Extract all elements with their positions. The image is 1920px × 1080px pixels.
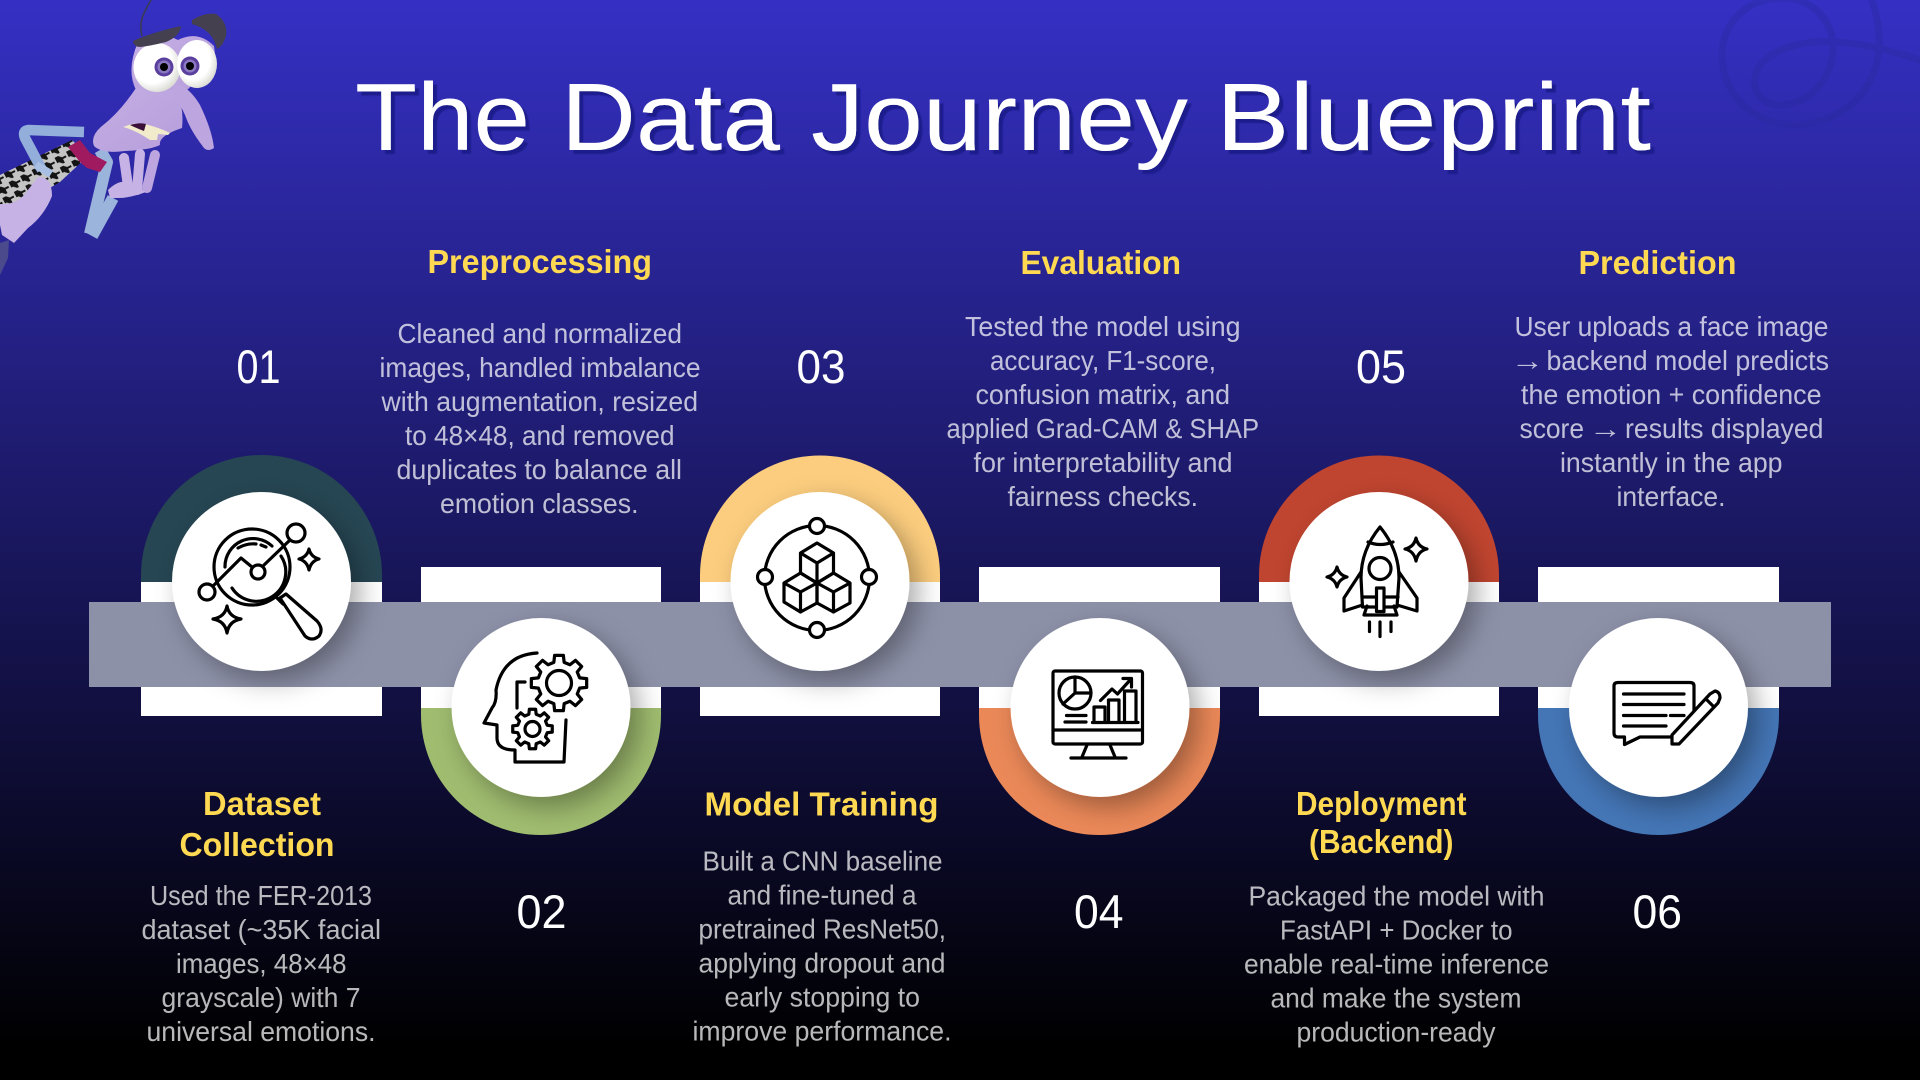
heading: Dataset Collection: Dataset bbox=[203, 785, 321, 822]
text block: Preprocessing: images, handled imbalance bbox=[380, 352, 700, 383]
text block: Preprocessing: Cleaned and normalized bbox=[398, 318, 682, 349]
text block: Prediction: instantly in the app bbox=[1560, 447, 1782, 478]
step 05 number: 05 bbox=[1356, 340, 1406, 393]
text block: Prediction: interface. bbox=[1616, 481, 1726, 512]
step 06 number: 06 bbox=[1632, 885, 1682, 938]
text block: Prediction: results displayed bbox=[1625, 413, 1824, 444]
timeline strip bbox=[89, 602, 1831, 687]
heading: Dataset Collection bbox=[180, 785, 334, 863]
text block: Preprocessing bbox=[380, 318, 700, 519]
icon: monitor with charts bbox=[1053, 671, 1142, 758]
icon: magnifier over chart bbox=[199, 524, 321, 639]
text block: Model Training: early stopping to bbox=[724, 982, 920, 1012]
text block: Model Training: and fine-tuned a bbox=[728, 880, 917, 910]
text block: Dataset Collection: universal emotions. bbox=[146, 1016, 376, 1047]
text block: Model Training: improve performance. bbox=[692, 1016, 952, 1046]
step 3 circle bbox=[730, 492, 910, 671]
text block: Model Training: Built a CNN baseline bbox=[702, 846, 942, 876]
text block: Preprocessing: duplicates to balance all bbox=[396, 454, 682, 485]
text block: Evaluation: accuracy, F1-score, bbox=[990, 345, 1216, 376]
text block: Prediction: → bbox=[1589, 413, 1622, 444]
text block: Evaluation: for interpretability and bbox=[974, 447, 1232, 478]
decorative swirl bbox=[1722, 0, 1920, 125]
text block: Preprocessing: emotion classes. bbox=[440, 488, 638, 519]
text block: Prediction: → bbox=[1511, 345, 1544, 376]
text block: Prediction bbox=[1511, 311, 1829, 512]
text block: Evaluation: applied Grad-CAM & SHAP bbox=[946, 413, 1259, 444]
title: Journey bbox=[811, 64, 1188, 171]
heading: Deployment (Backend): Deployment bbox=[1296, 785, 1466, 822]
step 6 base: arch and white band bbox=[1538, 567, 1779, 835]
title: Blueprint bbox=[1216, 64, 1651, 171]
heading: Prediction: Prediction bbox=[1578, 244, 1736, 281]
text block: Deployment: production-ready bbox=[1296, 1016, 1496, 1048]
text block: Dataset Collection: images, 48×48 bbox=[176, 948, 346, 979]
heading: Deployment (Backend) bbox=[1296, 785, 1466, 860]
text block: Model Training: pretrained ResNet50, bbox=[698, 914, 946, 944]
step 2 base: arch and white band bbox=[421, 567, 661, 835]
text block: Deployment: FastAPI + Docker to bbox=[1280, 914, 1512, 946]
heading: Preprocessing: Preprocessing bbox=[428, 243, 652, 280]
heading: Dataset Collection: Collection bbox=[180, 826, 334, 863]
mascot illustration bbox=[0, 0, 226, 275]
text block: Evaluation: confusion matrix, and bbox=[976, 379, 1230, 410]
text block: Prediction: score bbox=[1520, 413, 1584, 444]
step 6 circle bbox=[1569, 618, 1748, 797]
step 04 number: 04 bbox=[1074, 885, 1124, 938]
text block: Deployment: Packaged the model with bbox=[1248, 880, 1544, 912]
title: The bbox=[355, 64, 530, 171]
text block: Model Training: applying dropout and bbox=[698, 948, 946, 978]
step 01 number: 01 bbox=[236, 340, 280, 393]
title bbox=[355, 64, 1651, 171]
icon: head with gears bbox=[484, 653, 587, 762]
text block: Evaluation: fairness checks. bbox=[1008, 481, 1198, 512]
step 5 circle bbox=[1290, 492, 1468, 671]
icon: rocket bbox=[1327, 527, 1427, 636]
step 1 base: arch and white band bbox=[141, 455, 382, 716]
text block: Dataset Collection: grayscale) with 7 bbox=[162, 982, 360, 1013]
step 2 circle bbox=[452, 618, 630, 797]
text block: Prediction: User uploads a face image bbox=[1514, 311, 1828, 342]
text block: Model Training bbox=[692, 846, 952, 1046]
text block: Preprocessing: with augmentation, resized bbox=[381, 386, 698, 417]
step 4 base: arch and white band bbox=[979, 567, 1220, 835]
text block: Dataset Collection: Used the FER-2013 bbox=[150, 880, 372, 911]
icon: note with pen bbox=[1614, 682, 1720, 744]
text block: Evaluation bbox=[946, 311, 1259, 512]
title: Data bbox=[561, 64, 781, 171]
text block: Dataset Collection bbox=[142, 880, 381, 1047]
step 5 base: arch and white band bbox=[1259, 456, 1499, 716]
text block: Deployment: enable real-time inference bbox=[1244, 948, 1549, 980]
icon: cubes in orbit bbox=[758, 518, 876, 638]
step 02 number: 02 bbox=[516, 885, 566, 938]
heading: Evaluation: Evaluation bbox=[1020, 244, 1181, 281]
step 03 number: 03 bbox=[796, 340, 846, 393]
step 4 circle bbox=[1010, 618, 1190, 797]
text block: Preprocessing: to 48×48, and removed bbox=[405, 420, 674, 451]
heading: Model Training: Model Training bbox=[704, 786, 938, 822]
text block: Deployment: and make the system bbox=[1270, 982, 1522, 1014]
text block: Prediction: backend model predicts bbox=[1546, 345, 1829, 376]
step 1 circle bbox=[172, 492, 351, 671]
text block: Prediction: the emotion + confidence bbox=[1521, 379, 1822, 410]
text block: Deployment bbox=[1244, 880, 1549, 1048]
step 3 base: arch and white band bbox=[700, 456, 940, 716]
heading: Deployment (Backend): (Backend) bbox=[1309, 823, 1454, 860]
text block: Evaluation: Tested the model using bbox=[965, 311, 1240, 342]
text block: Dataset Collection: dataset (~35K facial bbox=[142, 914, 381, 945]
